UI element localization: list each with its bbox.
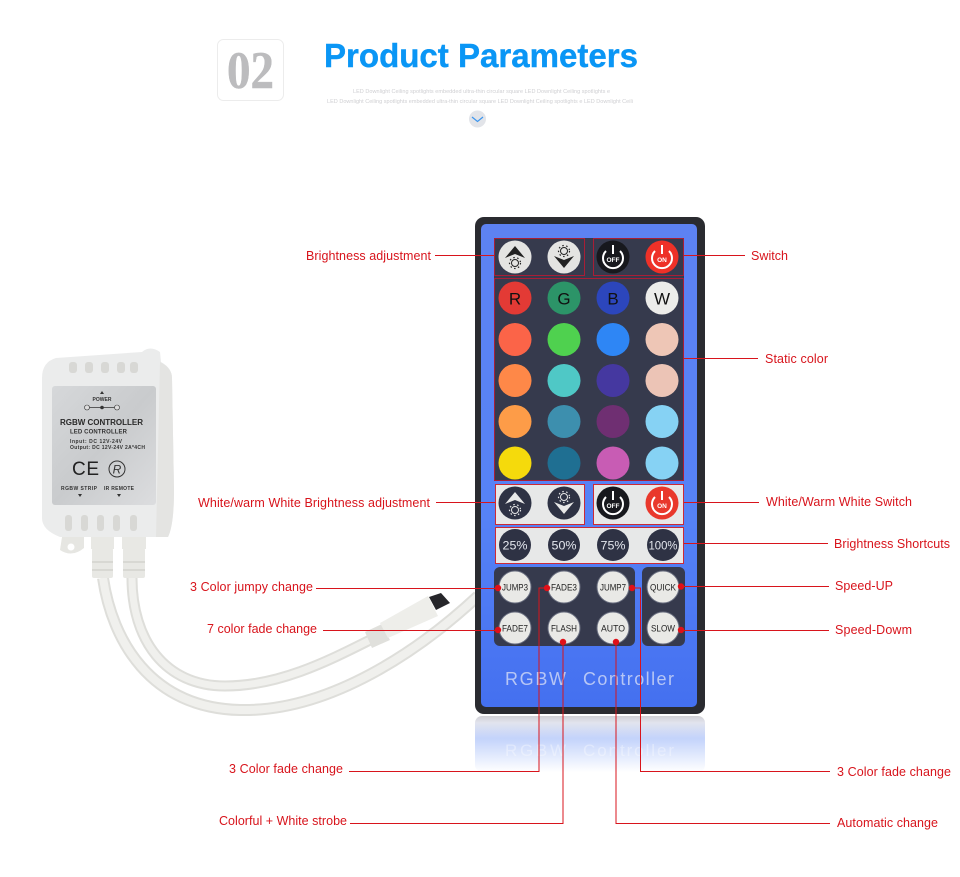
brightness shortcut buttons: 25% <box>502 538 528 552</box>
callout: 7 color fade change: 7 color fade change <box>207 622 317 636</box>
remote caption: Controller <box>583 669 674 689</box>
panel: mode buttons <box>494 567 685 646</box>
ribs <box>65 362 138 531</box>
controller box <box>42 348 174 578</box>
plug ribbed strain relief <box>365 624 390 648</box>
color buttons <box>498 282 678 480</box>
white off and on buttons: ON <box>657 503 667 510</box>
icon: chevron down <box>469 110 486 128</box>
box label: CE <box>72 459 99 480</box>
color buttons: W <box>654 290 670 308</box>
panel outlines <box>494 238 684 480</box>
plug tip <box>429 593 450 610</box>
callout: Static color: Static color <box>765 352 828 366</box>
remote reflection: Controller <box>583 741 674 760</box>
callout: Automatic change <box>613 639 938 830</box>
mode buttons <box>499 571 679 644</box>
plug body <box>380 596 438 638</box>
callout: 3 Color fade change left: 3 Color fade change <box>229 762 343 776</box>
brightness shortcut buttons: 50% <box>552 538 577 552</box>
off and on buttons: OFF <box>606 257 620 264</box>
box label: LED CONTROLLER <box>70 430 128 436</box>
color buttons: G <box>557 290 571 308</box>
mode buttons: JUMP3 <box>502 582 528 594</box>
callout: Speed-Dowm: Speed-Dowm <box>835 623 912 637</box>
subtitle text: LED Downlight Ceiling spotlights embedded ultra-thin circular square LED Downlight Ceiling spotlights e LED Downlight Ceili <box>327 99 633 105</box>
callout: 3 Color fade change right: 3 Color fade change <box>837 765 951 779</box>
mounting tab <box>60 537 84 554</box>
brightness shortcut buttons: 75% <box>600 538 626 552</box>
brightness up/down buttons <box>498 240 580 274</box>
off and on buttons: ON <box>657 257 667 264</box>
box label: POWER <box>93 397 112 403</box>
box label: RGBW STRIP <box>61 486 98 492</box>
callout: Speed-Dowm <box>678 623 912 637</box>
callout: Switch: Switch <box>751 249 788 263</box>
remote control <box>475 217 705 714</box>
mode buttons: SLOW <box>651 624 675 634</box>
subtitle text: LED Downlight Ceiling spotlights embedded ultra-thin circular square LED Downlight Ceiling spotlights e <box>353 89 610 95</box>
mode buttons: QUICK <box>650 582 677 594</box>
callout: White/warm White Brightness adjustment: White/warm White Brightness adjustment <box>198 496 431 510</box>
title: Product Parameters <box>324 38 638 75</box>
off and on buttons <box>596 240 678 274</box>
number badge: 02 <box>227 42 274 100</box>
box label: RGBW CONTROLLER <box>60 418 143 427</box>
color buttons: B <box>607 290 619 308</box>
callout: Brightness adjustment: Brightness adjustment <box>306 249 432 263</box>
box label <box>52 386 156 505</box>
remote reflection <box>475 716 705 772</box>
panel: top buttons and static colors <box>494 238 684 481</box>
callout: Brightness Shortcuts: Brightness Shortcuts <box>834 537 950 551</box>
callout: 3 Color fade change left <box>229 585 550 776</box>
mode buttons: AUTO <box>601 624 625 634</box>
box label: R <box>113 462 122 476</box>
callout: Automatic change: Automatic change <box>837 816 938 830</box>
brightness shortcut buttons <box>499 529 679 561</box>
subtitle text <box>327 89 633 105</box>
callout: 3 Color jumpy change: 3 Color jumpy change <box>190 580 313 594</box>
white off and on buttons: OFF <box>606 503 620 510</box>
callout: Colorful + White strobe <box>219 639 566 828</box>
callout: Switch <box>684 249 788 263</box>
remote caption <box>505 669 674 689</box>
box label: Output: DC 12V-24V 2A*4CH <box>70 445 145 451</box>
mode buttons: FADE7 <box>502 624 528 634</box>
mode buttons: FLASH <box>551 624 577 634</box>
mode buttons: FADE3 <box>551 582 577 594</box>
mode buttons: JUMP7 <box>600 582 626 594</box>
remote caption: RGBW <box>505 669 566 689</box>
box label: Input: DC 12V-24V <box>70 439 123 445</box>
strain reliefs <box>91 537 146 578</box>
white brightness buttons <box>498 486 580 520</box>
brightness shortcut buttons: 100% <box>648 538 678 552</box>
callout: Speed-UP <box>678 579 893 593</box>
callout: Speed-UP: Speed-UP <box>835 579 893 593</box>
callout: 7 color fade change <box>207 622 501 636</box>
cables and plug <box>103 578 478 710</box>
callout: 3 Color jumpy change <box>190 580 501 594</box>
callout: White/Warm White Switch: White/Warm White Switch <box>766 495 912 509</box>
white off and on buttons <box>596 486 678 520</box>
box label: IR REMOTE <box>104 486 135 492</box>
callout: Colorful + White strobe: Colorful + White strobe <box>219 814 347 828</box>
remote reflection: RGBW <box>505 741 566 760</box>
callout: 3 Color fade change right <box>629 585 951 779</box>
color buttons: R <box>509 290 521 308</box>
panel: white buttons <box>496 484 684 564</box>
